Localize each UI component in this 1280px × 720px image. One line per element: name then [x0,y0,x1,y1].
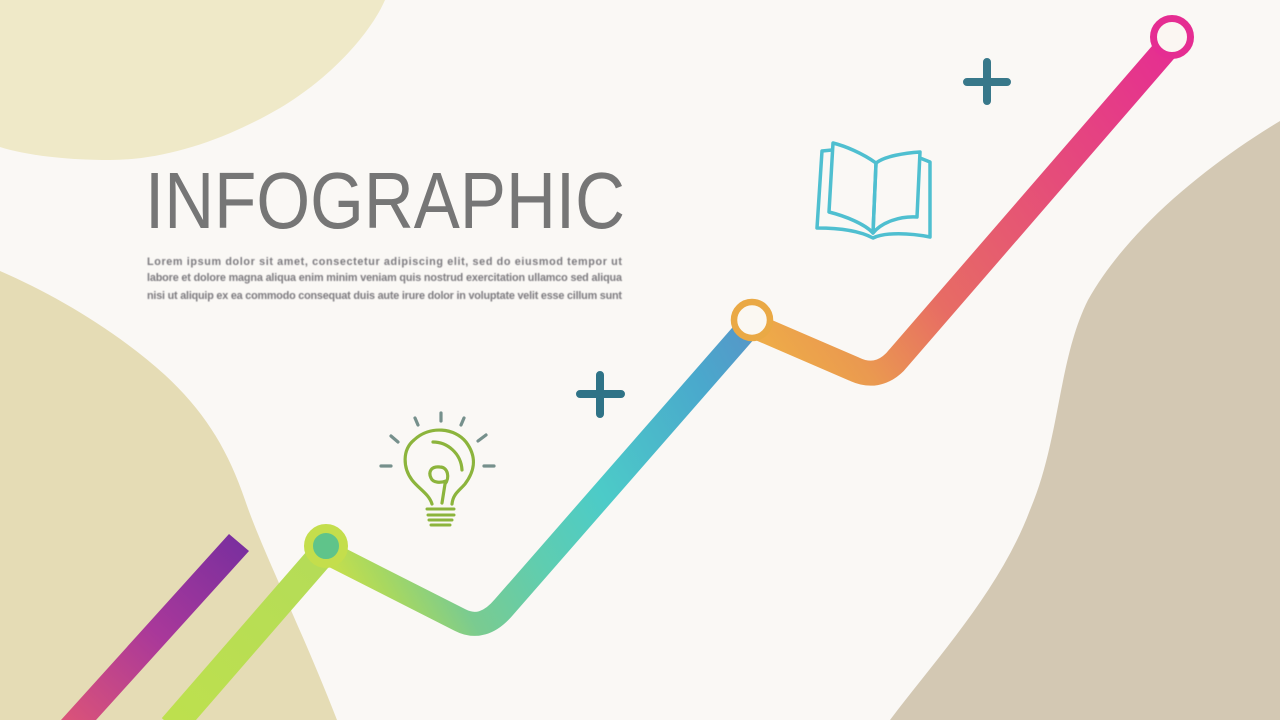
text block: Lorem ipsum dolor sit amet, consectetur adipiscing elit, sed do eiusmod tempor ut [147,256,622,268]
line segment: teal rise [326,329,747,624]
blob: top left [0,0,385,160]
purple diagonal bar [61,534,249,720]
bulb base [427,509,454,525]
icon: plus top [967,62,1007,101]
node: pink [1154,18,1190,56]
blob: bottom left [0,271,337,720]
bulb outline [405,430,473,504]
title: INFOGRAPHIC [145,156,625,245]
icon: light bulb [381,413,494,525]
node: green [308,528,344,564]
line segment: green rise [172,552,324,720]
icon: plus middle [580,375,621,414]
bulb filament [430,442,462,503]
blob: right [890,121,1280,720]
text block: nisi ut aliquip ex ea commodo consequat duis aute irure dolor in voluptate velit esse cillum sunt [147,290,622,302]
line segment: pink rise [752,42,1172,373]
text block: labore et dolore magna aliqua enim minim veniam quis nostrud exercitation ullamco sed aliqua [147,272,623,284]
icon: open book [817,143,930,238]
growth line [172,42,1172,720]
bulb rays [381,413,494,466]
node: orange [734,302,770,338]
text block [147,256,623,302]
